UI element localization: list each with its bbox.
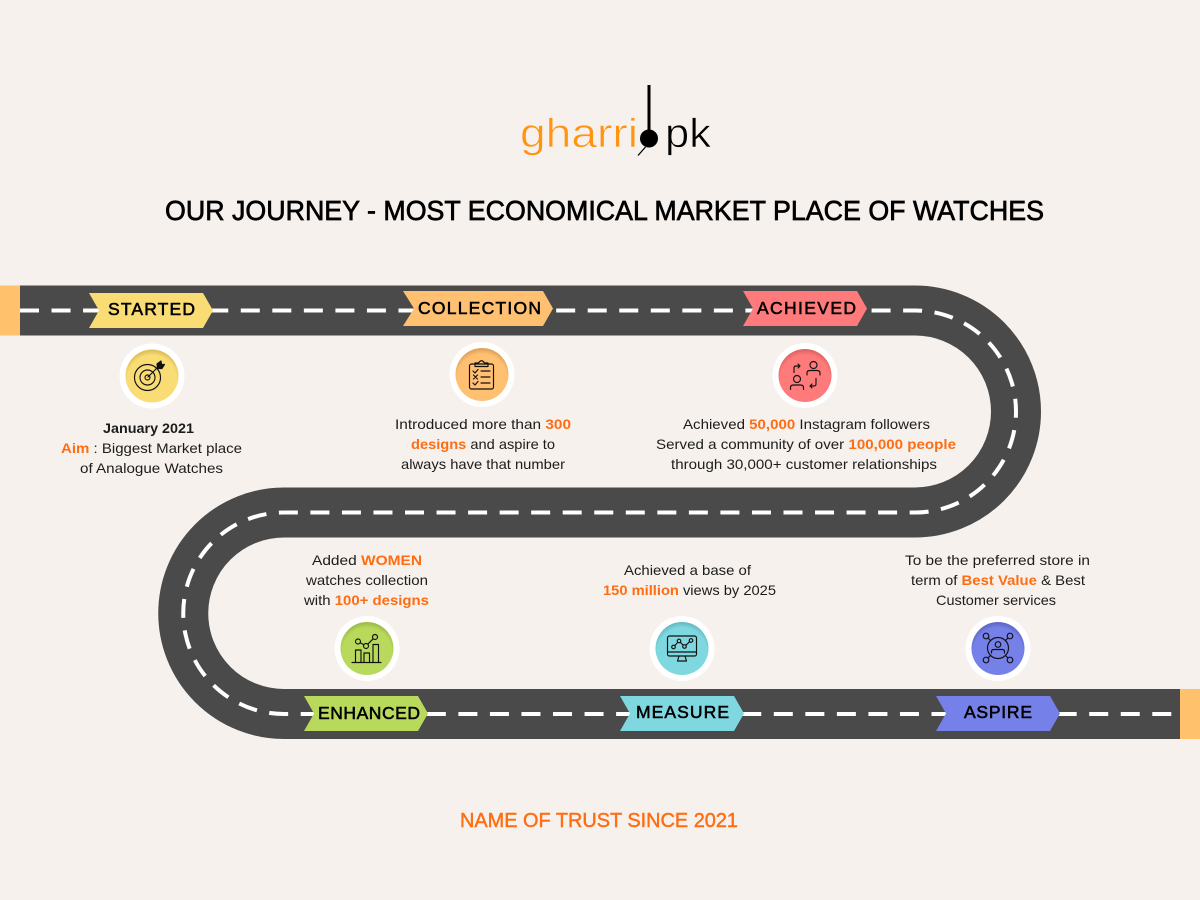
road start cap: [0, 286, 20, 336]
text: aspire: To be the preferred store in: [905, 552, 1090, 568]
logo: gharri.pk: [520, 85, 712, 156]
tag: measure: [620, 696, 744, 731]
text: measure: Achieved a base of: [624, 562, 751, 578]
text: achieved: Achieved 50,000 Instagram followers: [683, 416, 930, 432]
tag: achieved: ACHIEVED: [757, 298, 856, 318]
text: collection: always have that number: [401, 456, 565, 472]
text: measure: 150 million views by 2025: [603, 582, 776, 598]
tag: enhanced: [304, 696, 428, 731]
tag: started: STARTED: [108, 299, 195, 319]
tag: collection: COLLECTION: [418, 298, 541, 318]
logo: gharri.pk: gharri: [520, 110, 638, 156]
icon: bar chart growth: [334, 616, 400, 681]
text: aspire: term of Best Value & Best: [911, 572, 1085, 588]
logo: gharri.pk: pk: [665, 110, 712, 156]
tag: aspire: ASPIRE: [964, 702, 1032, 722]
text: collection: Introduced more than 300: [395, 416, 571, 432]
icon: network person: [966, 616, 1030, 681]
tag: enhanced: ENHANCED: [318, 703, 420, 723]
text: enhanced: [303, 552, 429, 608]
footer tagline: NAME OF TRUST SINCE 2021: [460, 810, 738, 832]
text: started: of Analogue Watches: [80, 460, 223, 476]
tag: achieved: [743, 291, 867, 326]
text: enhanced: Added WOMEN: [312, 552, 422, 568]
text: started: [61, 420, 242, 476]
text: aspire: [905, 552, 1090, 608]
tag: measure: MEASURE: [636, 702, 729, 722]
text: achieved: [656, 416, 956, 472]
text: collection: designs and aspire to: [411, 436, 555, 452]
text: enhanced: with 100+ designs: [303, 592, 429, 608]
text: achieved: Served a community of over 100,000 people: [656, 436, 956, 452]
text: started: Aim : Biggest Market place: [61, 440, 242, 456]
winding road: [0, 310, 1200, 714]
text: enhanced: watches collection: [305, 572, 428, 588]
tag: collection: [403, 291, 553, 326]
road end cap: [1180, 689, 1200, 739]
tag: aspire: [936, 696, 1060, 731]
icon: people exchange: [772, 343, 838, 408]
icon: target: [120, 344, 184, 408]
text: measure: [603, 562, 776, 598]
text: collection: [395, 416, 571, 472]
text: achieved: through 30,000+ customer relationships: [671, 456, 937, 472]
text: started: January 2021: [103, 420, 194, 436]
title: OUR JOURNEY - MOST ECONOMICAL MARKET PLACE OF WATCHES: [165, 195, 1044, 226]
tag: started: [89, 293, 213, 328]
icon: monitor chart: [650, 616, 714, 681]
text: aspire: Customer services: [936, 592, 1056, 608]
icon: clipboard: [450, 342, 514, 407]
